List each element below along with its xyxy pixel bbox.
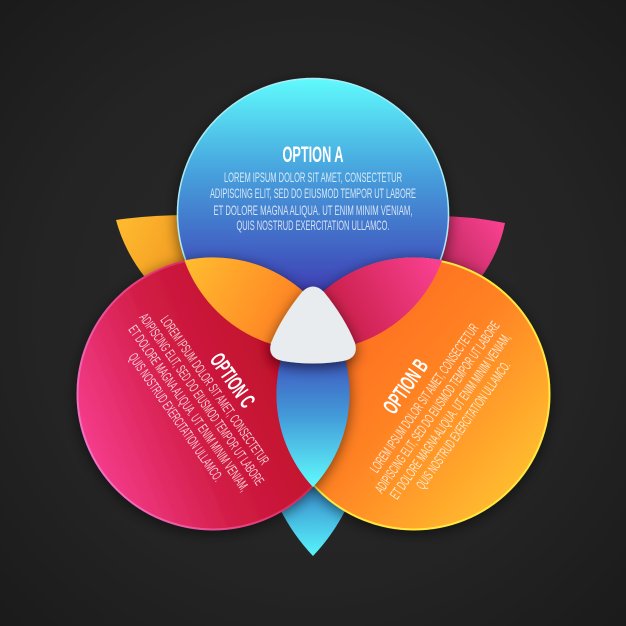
- heading: option B: OPTION B: [378, 354, 433, 418]
- heading: option A: OPTION A: [282, 142, 344, 167]
- body: option A: ET DOLORE MAGNA ALIQUA. UT ENIM MINIM VENIAM,: [214, 202, 412, 218]
- body: option C: QUIS NOSTRUD EXERCITATION ULLAMCO.: [126, 350, 226, 484]
- body: option B: LOREM IPSUM DOLOR SIT AMET, CONSECTETUR: [366, 321, 482, 475]
- circle: option C: [78, 258, 348, 530]
- text block: option C: [125, 310, 273, 494]
- body: option C: [125, 310, 273, 494]
- circle: option A: [178, 78, 448, 350]
- body: option A: ADIPISCING ELIT, SED DO EIUSMOD TEMPOR UT LABORE: [210, 185, 416, 201]
- body: option A: LOREM IPSUM DOLOR SIT AMET, CONSECTETUR: [224, 169, 402, 185]
- petal: pink top-right: [431, 216, 505, 276]
- body: option A: [210, 169, 416, 233]
- text block: option A: [210, 142, 416, 233]
- heading: option C: OPTION C: [205, 348, 260, 412]
- body: option A: QUIS NOSTRUD EXERCITATION ULLAMCO.: [236, 217, 390, 233]
- petal: orange top-left: [116, 215, 195, 276]
- body: option C: ET DOLORE MAGNA ALIQUA. UT ENIM MINIM VENIAM,: [125, 322, 253, 494]
- body: option B: ET DOLORE MAGNA ALIQUA. UT ENIM MINIM VENIAM,: [386, 330, 514, 502]
- body: option B: QUIS NOSTRUD EXERCITATION ULLAMCO.: [413, 358, 513, 492]
- center rounded triangle: [270, 286, 356, 364]
- body: option B: ADIPISCING ELIT, SED DO EIUSMOD TEMPOR UT LABORE: [371, 318, 503, 496]
- overlap: B and C blue: [277, 302, 349, 486]
- petal: cyan bottom: [278, 470, 348, 556]
- overlap: A and B red: [286, 258, 441, 350]
- body: option B: [366, 318, 514, 502]
- circle: option B: [278, 258, 550, 530]
- overlap: A and C orange: [185, 258, 341, 350]
- text block: option B: [366, 318, 514, 502]
- body: option C: LOREM IPSUM DOLOR SIT AMET, CONSECTETUR: [157, 313, 273, 467]
